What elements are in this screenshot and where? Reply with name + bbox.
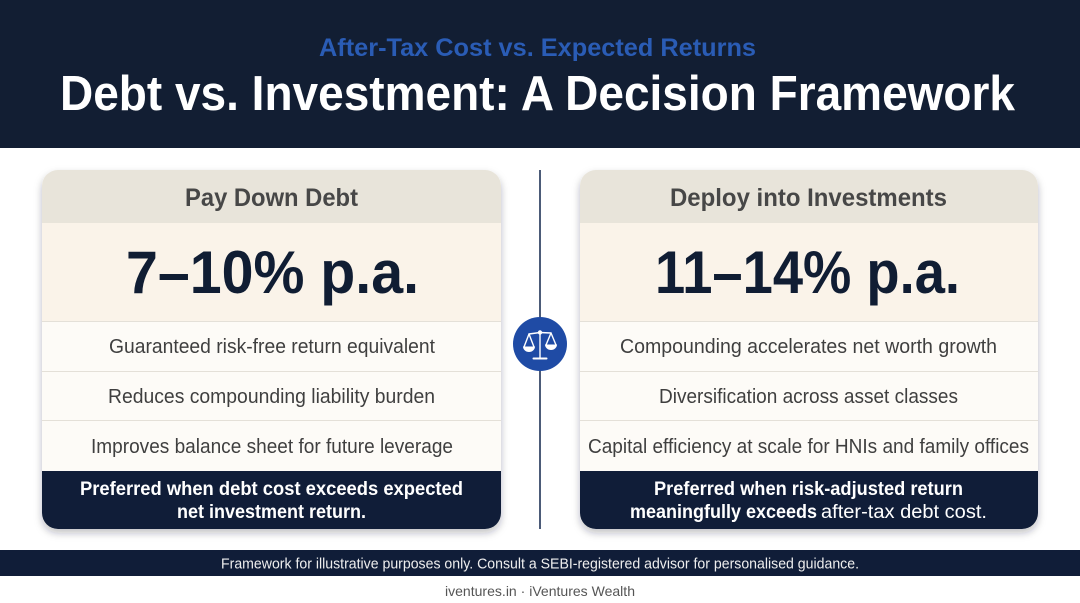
benefit row 1: Guaranteed risk-free return equivalent — [109, 336, 435, 358]
disclaimer bar — [0, 550, 1080, 576]
disclaimer bar: Framework for illustrative purposes only. Consult a SEBI-registered advisor for personalised guidance. — [221, 556, 859, 572]
subtitle: After-Tax Cost vs. Expected Returns — [319, 34, 756, 62]
icon: balance scale — [513, 317, 567, 371]
verdict — [630, 479, 987, 523]
verdict: net investment return. — [177, 502, 366, 523]
header band — [0, 0, 1080, 148]
return figure: 11–14% p.a. — [655, 239, 960, 306]
benefit row 1: Compounding accelerates net worth growth — [620, 336, 997, 358]
verdict: Preferred when risk-adjusted return — [654, 479, 963, 500]
benefit row 2: Reduces compounding liability burden — [108, 386, 435, 408]
panel heading: Deploy into Investments — [670, 184, 947, 212]
title: Debt vs. Investment: A Decision Framework — [60, 67, 1016, 121]
verdict — [80, 479, 463, 523]
panel: deploy into investments — [580, 170, 1038, 529]
return figure: 7–10% p.a. — [126, 239, 419, 306]
benefit row 3: Improves balance sheet for future leverage — [91, 436, 453, 458]
verdict: after-tax debt cost. — [821, 502, 987, 523]
center divider — [539, 170, 541, 529]
verdict: meaningfully exceeds — [630, 502, 817, 523]
verdict: Preferred when debt cost exceeds expected — [80, 479, 463, 500]
panel heading: Pay Down Debt — [185, 184, 359, 212]
panel: pay down debt — [42, 170, 501, 529]
benefit row 2: Diversification across asset classes — [659, 386, 958, 408]
source credit: iventures.in · iVentures Wealth — [445, 583, 635, 599]
benefit row 3: Capital efficiency at scale for HNIs and family offices — [588, 436, 1029, 458]
